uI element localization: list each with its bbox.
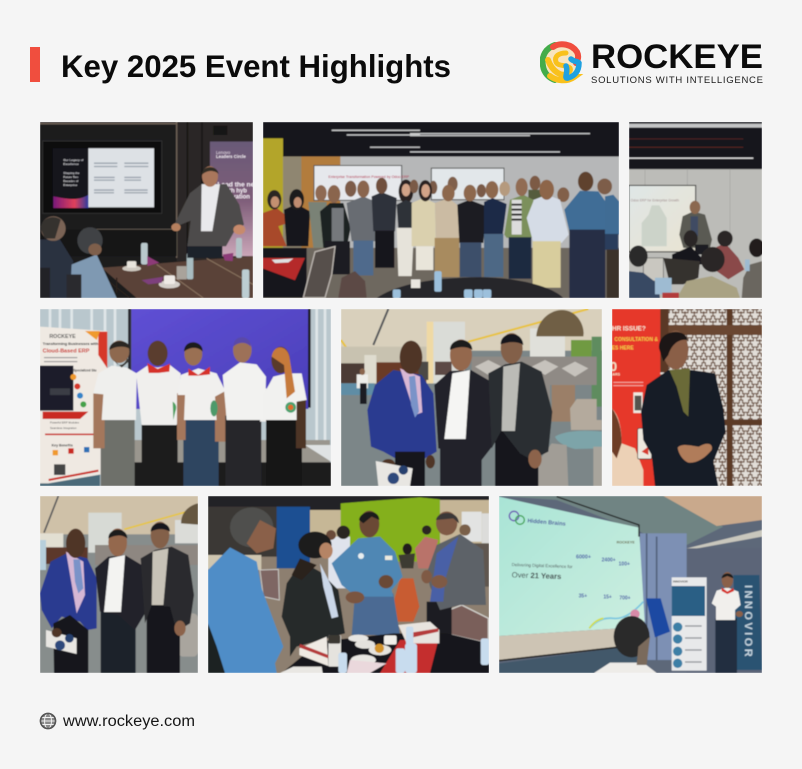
logo: Rockeye [540, 40, 763, 86]
foreground table setting [280, 622, 489, 673]
TV screen: Our Legacy of [63, 158, 83, 162]
Rockeye roll-up banner [40, 327, 107, 483]
TV screen: Excellence [63, 162, 79, 166]
tagline: SOLUTIONS WITH INTELLIGENCE [591, 75, 763, 86]
roll-up banner: with hyb [222, 189, 247, 195]
ceiling [499, 496, 723, 550]
icon: swirl mark [543, 42, 579, 82]
title: Key 2025 Event Highlights [61, 48, 451, 84]
screen with skyline slide: Odoo ERP for Enterprise Growth [631, 198, 679, 202]
panel: speaker in front of projection screen [629, 122, 762, 298]
walking person in background [357, 368, 368, 404]
panel: speaker by red HR banner [612, 309, 762, 486]
red HR banner [610, 309, 660, 486]
presenter [712, 572, 743, 673]
pendant lamp [536, 310, 584, 336]
TV screen: Decades of [63, 179, 78, 183]
man in blue suit [40, 529, 97, 673]
product banner [672, 577, 707, 671]
Rockeye roll-up banner: Seamless Integration [50, 426, 77, 430]
red HR banner: HR ISSUE? [612, 325, 646, 332]
team member 3 [177, 342, 226, 486]
projection screen: Over 21 Years [512, 570, 562, 581]
projection screen [499, 497, 647, 661]
team member 4 [223, 337, 267, 486]
man in blue shirt [332, 511, 403, 635]
green accent wall [341, 497, 440, 562]
roll-up banner: Lenovo [216, 150, 231, 155]
panel: Hidden Brains presentation [499, 496, 762, 673]
TV screen: Future Two [63, 175, 79, 179]
panel: group photo in meeting room [263, 122, 619, 298]
team member 2 [136, 341, 181, 486]
projection screen: 2400+ [602, 558, 616, 564]
icon: globe [40, 714, 56, 728]
TV screen: Shaping the [63, 171, 80, 175]
projection screen: Hidden Brains [527, 518, 566, 528]
panel: three executives in hotel lobby [341, 309, 602, 486]
attendees right [410, 172, 619, 298]
projection screens: Enterprise Transformation Powered by Odoo ERP [328, 175, 410, 179]
foreground tables and chairs [263, 247, 619, 298]
website text: www.rockeye.com [62, 713, 195, 730]
man in light blue shirt, back view [208, 507, 283, 673]
woman in leather jacket [282, 532, 345, 657]
presenter [171, 166, 245, 258]
wooden lattice frame [663, 309, 762, 486]
product banner: INNOVIOR [673, 580, 689, 584]
speaker in dark blazer [641, 331, 726, 486]
INNOVIOR banner [733, 575, 762, 670]
panel: networking around a table [208, 496, 489, 673]
man in charcoal jacket [141, 522, 194, 673]
projection screen: Delivering Digital Excellence for [512, 562, 573, 569]
team member 5 [263, 347, 307, 486]
projection screen: 15+ [603, 594, 612, 600]
roll-up banner [210, 142, 255, 256]
panel: photo presenter at Lenovo Leaders Circle [40, 122, 253, 298]
man in grey blazer [421, 511, 486, 635]
speaker [679, 201, 712, 254]
projection screen: 100+ [619, 561, 630, 567]
man in black blazer [95, 528, 145, 673]
carved partition [418, 357, 597, 428]
projection screen: ROCKEYE [617, 540, 635, 544]
Rockeye roll-up banner: Key Benefits [52, 444, 73, 448]
seated guests [40, 216, 117, 298]
background guests [326, 524, 471, 622]
panel: Rockeye team on stage [40, 309, 331, 486]
furniture [538, 399, 602, 486]
screen with skyline slide [629, 185, 696, 252]
man in charcoal jacket [488, 333, 552, 486]
team member 1 [93, 340, 137, 486]
accent bar [30, 47, 40, 82]
panel: three executives close-up [40, 496, 198, 673]
table [102, 238, 253, 298]
Rockeye roll-up banner: Powerful ERP Modules [50, 420, 80, 424]
man in black blazer [434, 339, 493, 486]
red HR banner: CONSULTATION & [614, 337, 658, 343]
Rockeye roll-up banner: ROCKEYE [49, 334, 76, 340]
TV screen [43, 141, 162, 213]
man in blue suit [367, 341, 437, 486]
red HR banner: ARS [612, 373, 621, 377]
purple backdrop [131, 309, 308, 409]
projection screen: 6000+ [576, 554, 591, 560]
Rockeye roll-up banner: Cloud-Based ERP [43, 349, 90, 355]
blue sign [646, 598, 670, 637]
footer website [40, 712, 195, 730]
Rockeye roll-up banner: Specialized Stu [73, 368, 97, 372]
projection screen: 35+ [579, 594, 587, 600]
roll-up banner: Leaders Circle [216, 154, 246, 159]
seated audience member [594, 616, 657, 673]
attendees left [263, 178, 418, 276]
projection screen: 700+ [619, 595, 631, 601]
TV screen: Enterprise [63, 183, 78, 187]
Rockeye roll-up banner: Transforming Businesses with [43, 342, 99, 346]
audience [629, 230, 764, 298]
projection screens [314, 166, 504, 200]
chairs [208, 569, 488, 643]
INNOVIOR banner: INNOVIOR [742, 585, 754, 657]
roll-up banner: novation [225, 194, 250, 200]
